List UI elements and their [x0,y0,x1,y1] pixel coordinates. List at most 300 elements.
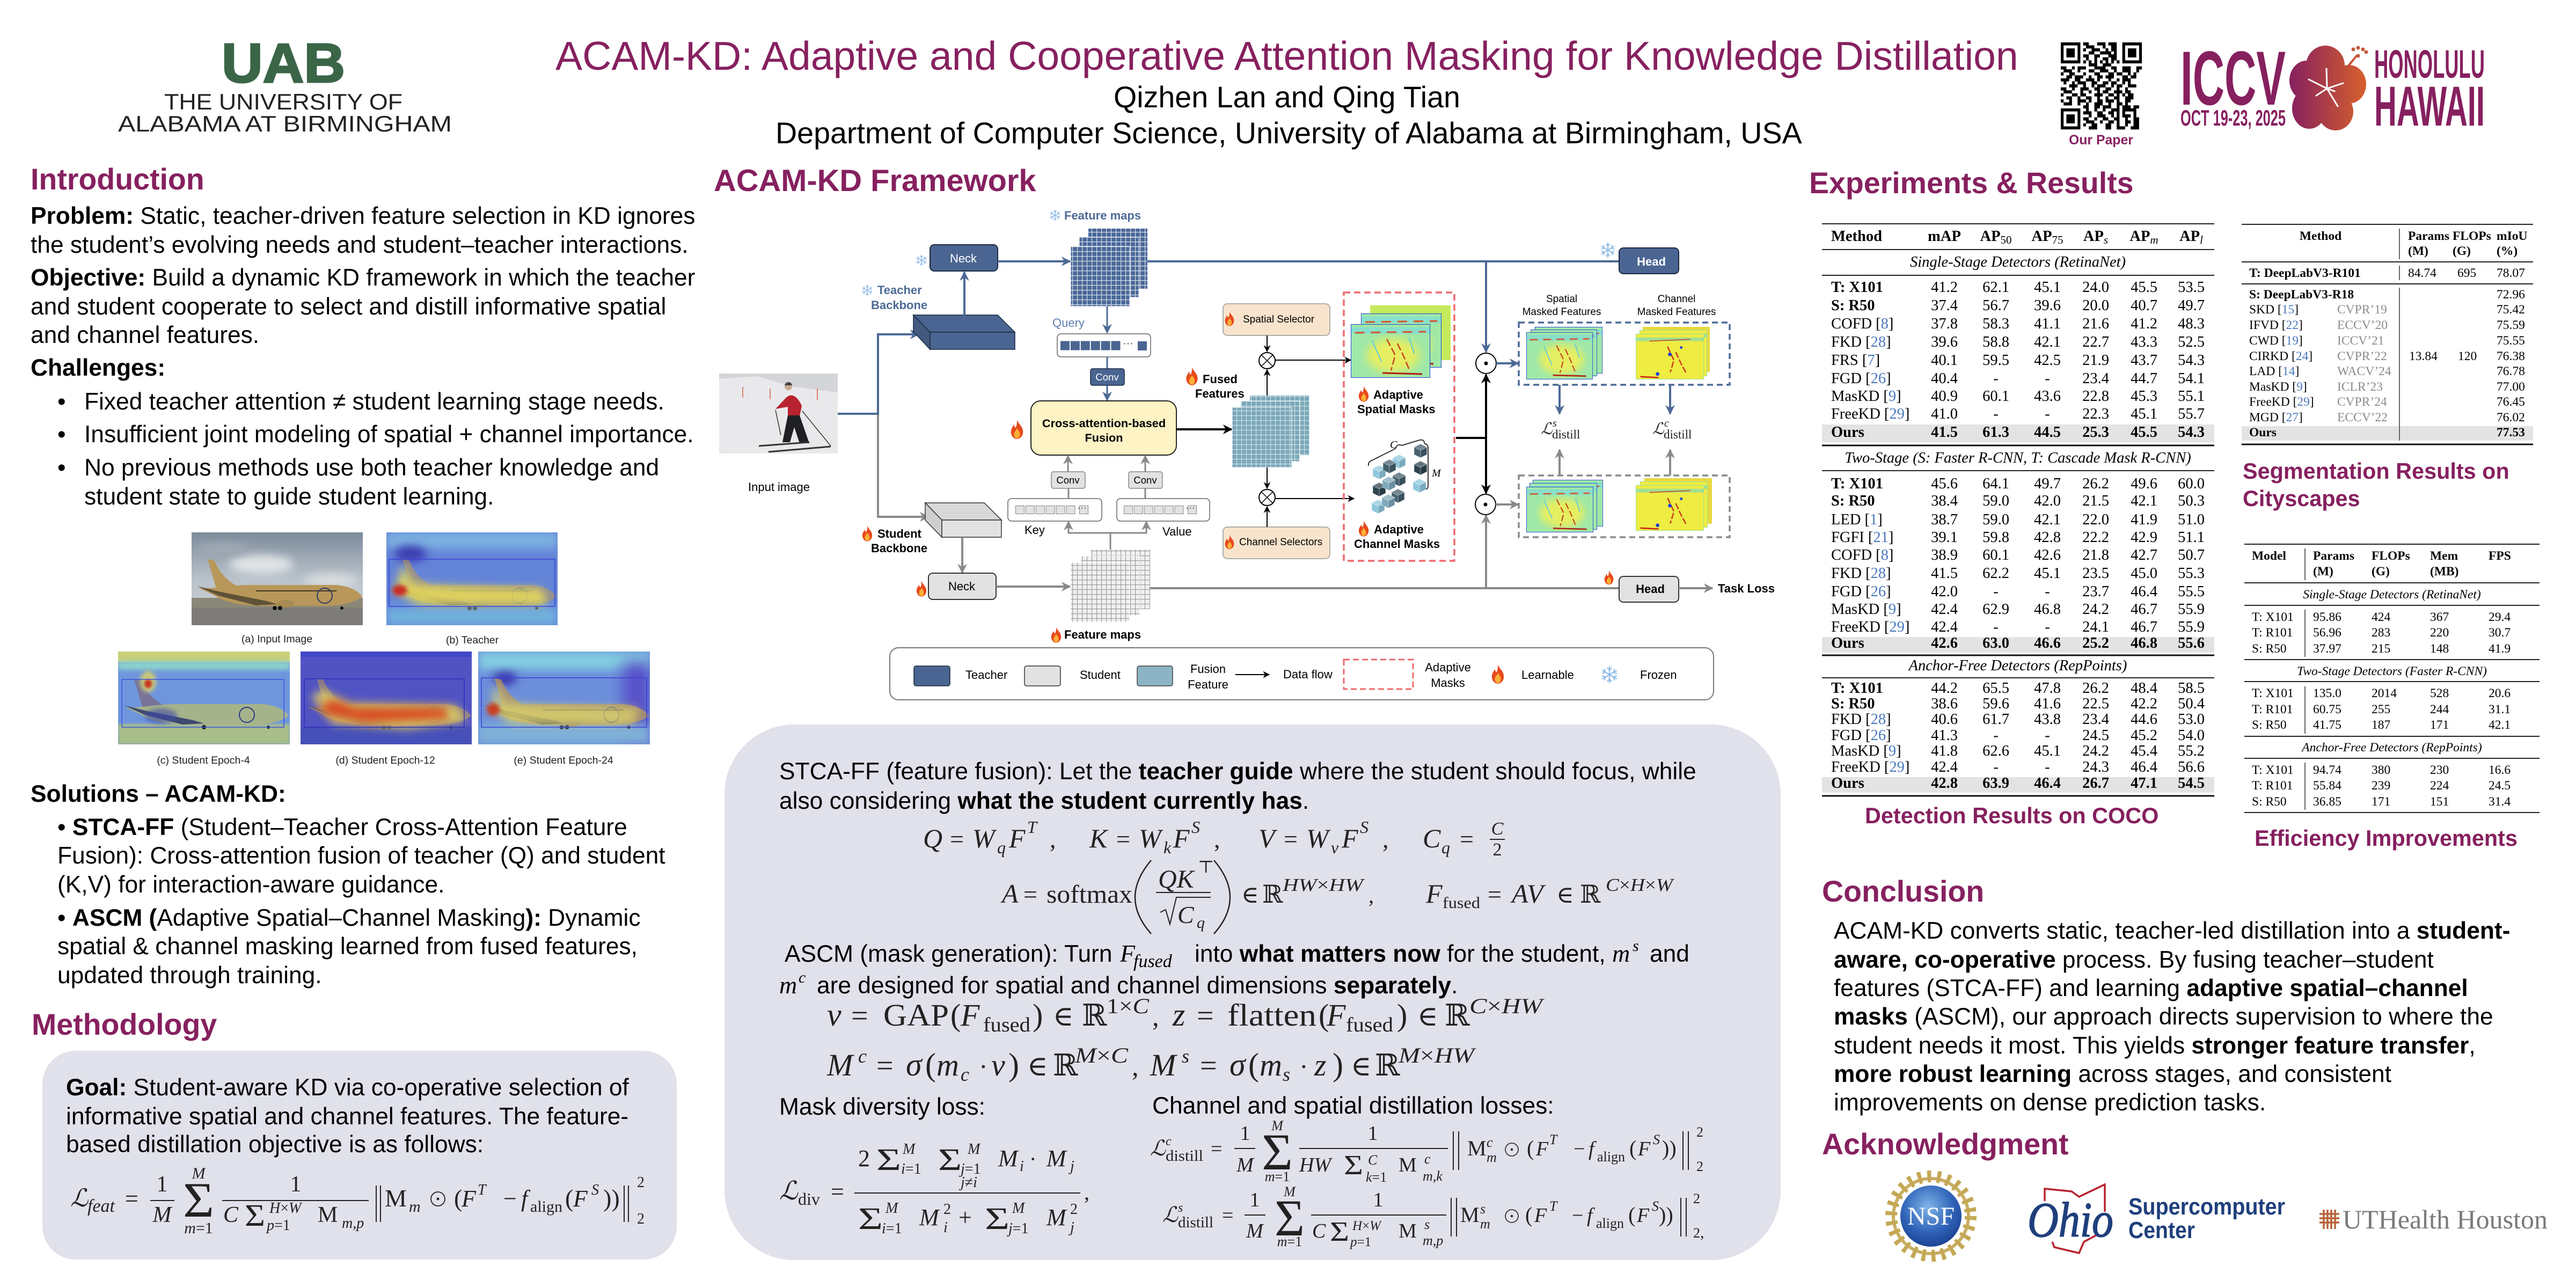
formula: channel and spatial masks: ) [1333,1047,1343,1082]
table: efficiency improvements: 528 [2430,686,2449,700]
formula: channel distillation loss: m [1487,1150,1497,1165]
formula: spatial distillation loss: p=1 [1349,1235,1371,1249]
formula: spatial distillation loss: C [1312,1220,1326,1242]
table: detection results on COCO: Ours [1831,424,1864,441]
cross-attention fusion box: Fusion [1085,431,1123,444]
table: detection results on COCO: 47.1 [2131,775,2157,792]
formula: channel distillation loss: k=1 [1366,1169,1387,1185]
table: detection results on COCO: 46.7 [2131,619,2157,635]
formula: feature distillation loss: Σ [245,1198,265,1233]
table: detection results on COCO: 41.9 [2131,511,2157,528]
formula: diversity loss: i [943,1219,948,1236]
table: detection results on COCO: 48.4 [2131,680,2157,697]
table: efficiency improvements: 148 [2430,642,2449,656]
table: detection results on COCO: 26.2 [2082,475,2109,492]
table: efficiency improvements: 29.4 [2489,610,2511,624]
formula: Q K V: , [1050,825,1056,853]
formula: spatial distillation loss: ( [1628,1203,1635,1227]
table: detection results on COCO: AP [2179,228,2200,245]
formula: spatial distillation loss: − [1572,1204,1583,1227]
formula: Q K V: , [1382,825,1389,853]
heading: Acknowledgment: Acknowledgment [1822,1128,2068,1161]
table: segmentation results: 76.45 [2497,395,2525,409]
formula: channel and spatial masks: m [936,1048,959,1082]
table: detection results on COCO: 41.5 [1931,424,1958,441]
formula: channel and spatial masks: s [1283,1064,1290,1085]
table: detection results on COCO: 47.8 [2034,680,2061,697]
student backbone block [925,503,1001,537]
table: detection results on COCO: 40.7 [2131,297,2157,314]
formula: spatial distillation loss: m,p [1423,1233,1443,1248]
formula: channel distillation loss: Σ [1344,1150,1363,1181]
formula: feature distillation loss: M [318,1203,338,1227]
formula: diversity loss: 2 [858,1145,870,1172]
table: efficiency improvements: (MB) [2430,565,2459,579]
table: efficiency improvements: 41.75 [2313,718,2341,732]
long line and arrow: student features [996,515,1619,588]
formula: feature distillation loss: M [191,1165,206,1182]
formula: spatial distillation loss: f [1587,1204,1595,1227]
table: detection results on COCO: 42.2 [2131,696,2157,712]
heading: Experiments and Results: Experiments & Results [1809,166,2134,200]
table: detection results on COCO: 62.1 [1982,279,2009,296]
table: detection results on COCO: 61.3 [1982,424,2009,441]
table: efficiency improvements: Mem [2430,549,2458,563]
table: efficiency improvements [2244,544,2540,813]
table: efficiency improvements: 31.1 [2489,702,2511,716]
table: detection results on COCO: 25.3 [2082,424,2109,441]
formula: GAP and flatten [827,994,1545,1036]
label: adaptive channel masks: Channel Masks [1354,537,1440,551]
table: efficiency improvements: 424 [2372,610,2390,624]
formula: spatial distillation loss: 2 [1693,1225,1700,1241]
table: segmentation results: MGD [27] [2249,411,2303,425]
label: adaptive spatial masks: Adaptive [1373,388,1423,401]
formula: diversity loss: , [1084,1180,1089,1204]
formula: Q K V: K [1089,823,1109,853]
formula: feature distillation loss: )) [603,1184,620,1212]
table: detection results on COCO: 54.3 [2178,352,2205,369]
formula: spatial distillation loss: ( [1525,1203,1532,1227]
hadamard node: student [1475,494,1518,515]
table: detection results on COCO: 64.1 [1982,475,2009,492]
formula: attention and fused features: fused [1443,894,1480,912]
formula: spatial distillation loss: ℒ [1162,1203,1179,1227]
text block: challenges: • [57,389,66,415]
formula: attention and fused features: ⊤ [1198,857,1214,876]
table: detection results on COCO: 41.2 [1931,279,1958,296]
formula: spatial distillation loss: )) [1659,1203,1673,1227]
table: detection results on COCO: - [1993,370,1999,387]
table: detection results on COCO: 50 [2001,233,2011,246]
formula: diversity loss: j=1 [1007,1220,1029,1237]
formula: Q K V: q [1441,838,1450,857]
table: segmentation results: SKD [15] [2249,303,2299,317]
table: detection results on COCO: 22.0 [2082,511,2109,528]
table: detection results on COCO: 22.8 [2082,388,2109,405]
formula: attention and fused features: QK [1158,865,1196,894]
table: detection results on COCO: FGD [26] [1831,583,1891,600]
table: detection results on COCO: 62.6 [1982,743,2009,759]
text block: solutions: • ASCM (Adaptive Spatial–Channel Masking): Dynamic [57,905,640,931]
text block: ASCM: c [799,969,806,986]
text block: STCA-FF [779,758,1696,814]
image: student epoch 4 heatmap [118,652,290,744]
table: detection results on COCO: 42.1 [2131,493,2157,509]
table: detection results on COCO: FreeKD [29] [1831,759,1909,775]
formula: channel distillation loss: Σ [1262,1123,1293,1181]
table: detection results on COCO: FreeKD [29] [1831,619,1909,635]
table: efficiency improvements: Params [2313,549,2354,563]
spatial selector: Spatial Selector [1243,314,1315,325]
label: fused features [1186,367,1245,400]
table: detection results on COCO: 41.0 [1931,406,1958,422]
formula: attention and fused features: , [1368,883,1374,908]
table: detection results on COCO: 59.5 [1982,352,2009,369]
table: detection results on COCO: 56.6 [2178,759,2205,775]
text block: challenges: No previous methods use both teacher knowledge and [84,455,659,481]
table: detection results on COCO: - [2045,583,2050,600]
text block: ASCM: into what matters now for the student, [1195,941,1606,967]
table: efficiency improvements: FPS [2489,549,2511,563]
caption: segmentation results: Segmentation Results on [2243,459,2509,484]
table: detection results on COCO: 42.0 [2034,493,2061,509]
table: detection results on COCO: 45.5 [2131,279,2157,296]
table: segmentation results: ECCV’20 [2337,318,2388,332]
formula: channel distillation loss: c [1166,1135,1172,1148]
framework diagram [719,209,1775,700]
table: detection results on COCO: 50.7 [2178,547,2205,564]
cross-attention fusion box [1031,401,1176,455]
formula: feature distillation loss [70,1165,645,1237]
formula: channel distill loss: c [1664,418,1669,429]
table: detection results on COCO: Method [1831,228,1882,245]
caption: epoch 4: (c) Student Epoch-4 [157,755,250,766]
table: detection results on COCO: Two-Stage (S: Faster R-CNN, T: Cascade Mask R-CNN) [1845,450,2191,466]
table: detection results on COCO: 23.7 [2082,583,2109,600]
teacher neck: Neck [950,252,977,265]
table: detection results on COCO: 45.1 [2034,565,2061,582]
logo: University of Alabama at Birmingham: ALABAMA AT BIRMINGHAM [118,111,452,136]
text block: STCA-FF: STCA-FF (feature fusion): Let the teacher guide where the student should focus, while [779,758,1696,785]
formula: spatial distillation loss: = [1222,1204,1233,1227]
table: detection results on COCO: 42.4 [1931,619,1958,635]
table: detection results on COCO: 39.6 [2034,297,2061,314]
table: segmentation results: Ours [2249,426,2277,440]
teacher head: Head [1637,255,1666,268]
formula: channel distillation loss: f [1589,1138,1597,1160]
table: detection results on COCO: 22.7 [2082,334,2109,350]
table: segmentation results: 77.53 [2497,426,2525,440]
text block: ASCM: m [779,971,797,999]
formula: feature distillation loss: = [125,1185,138,1212]
conv: query [1091,357,1124,400]
table: detection results on COCO: 55.2 [2178,743,2205,759]
table: detection results on COCO: 55.3 [2178,565,2205,582]
table: detection results on COCO: 46.4 [2131,583,2157,600]
channel selectors [1223,527,1330,559]
caption: input image: (a) Input Image [241,633,312,645]
table: efficiency improvements: 230 [2430,763,2449,777]
table: efficiency improvements: 224 [2430,779,2449,793]
label: adaptive channel masks: Adaptive [1374,523,1424,536]
table: efficiency improvements: (G) [2372,565,2390,579]
logo: ICCV Honolulu Hawaii: HAWAII [2374,75,2485,138]
heading: Introduction: Introduction [31,163,204,196]
formula: channel distillation loss: c [1424,1151,1431,1167]
text block: problem and objective: the student’s evolving needs and student–teacher interactions. [31,232,689,258]
heading: ACAM-KD Framework: ACAM-KD Framework [714,164,1036,198]
table: detection results on COCO: 44.2 [1931,680,1958,697]
table: detection results on COCO: 41.1 [2034,316,2061,332]
formula: channel and spatial masks: ∈ [1351,1051,1372,1082]
formula: attention and fused features: softmax [1046,880,1132,909]
table: detection results on COCO: 49.7 [2178,297,2205,314]
text block: problem and objective: and channel features. [31,322,259,348]
table: efficiency improvements: 244 [2430,702,2449,716]
table: detection results on COCO: 45.6 [1931,475,1958,492]
table: detection results on COCO: - [2045,406,2050,422]
text block: problem and objective: Problem: Static, teacher-driven feature selection in KD ignores [31,203,695,229]
table: detection results on COCO: - [2045,727,2050,744]
formula: channel distillation loss: M [1399,1154,1417,1176]
formula: feature distillation loss: ( [565,1184,573,1212]
formula: spatial distillation loss: M [1460,1203,1480,1227]
table: detection results on COCO: 43.6 [2034,388,2061,405]
formula: channel and spatial masks: v [991,1048,1005,1082]
table: detection results on COCO: Ours [1831,775,1864,792]
formula: feature distillation loss: C [223,1203,239,1227]
table: efficiency improvements: 95.86 [2313,610,2341,624]
table: segmentation results: 76.78 [2497,364,2525,378]
formula: channel and spatial masks: c [858,1045,867,1067]
formula: channel and spatial masks: · [1299,1051,1308,1081]
formula: diversity loss: M [998,1145,1019,1172]
text block: ASCM: s [1633,937,1639,955]
table: detection results on COCO [1822,224,2214,796]
table: detection results on COCO: 38.9 [1931,547,1958,564]
table: detection results on COCO: 42.9 [2131,529,2157,546]
formula: attention and fused features: F [1425,879,1443,909]
table: detection results on COCO: 59.8 [1982,529,2009,546]
text block: ASCM: ASCM (mask generation): Turn [785,941,1113,967]
formula: feature distillation loss: p=1 [266,1217,290,1234]
table: detection results on COCO: 40.9 [1931,388,1958,405]
table: detection results on COCO: 62.9 [1982,601,2009,618]
table: detection results on COCO: 45.5 [2131,424,2157,441]
table: segmentation results: LAD [14] [2249,364,2299,378]
formula: channel distillation loss: M [1236,1154,1255,1176]
table: segmentation results: 76.02 [2497,411,2525,425]
image: input airplane [192,532,363,625]
table: detection results on COCO: 22.2 [2082,529,2109,546]
conv and key branch: ··· [1077,502,1087,513]
formula: diversity loss: + [958,1204,972,1231]
teacher neck [917,245,998,271]
table: detection results on COCO: 22.3 [2082,406,2109,422]
formula: feature distillation loss: Σ [183,1173,214,1227]
arrows: masked features to distill losses [1560,385,1670,475]
table: detection results on COCO: 21.8 [2082,547,2109,564]
caption: teacher: (b) Teacher [446,634,499,646]
table: detection results on COCO: AP [2083,228,2104,245]
table: detection results on COCO: 45.1 [2131,406,2157,422]
formula: GAP and flatten: ) [1397,998,1407,1033]
formula: channel and spatial masks: ℝ [1375,1049,1401,1082]
table: detection results on COCO: FreeKD [29] [1831,406,1909,422]
table: segmentation results: ICCV’21 [2337,334,2384,348]
table: detection results on COCO: 53.5 [2178,279,2205,296]
table: efficiency improvements: T: X101 [2252,686,2294,700]
table: detection results on COCO: s [2104,233,2108,246]
formula: attention and fused features: q [1197,914,1205,932]
formula: attention and fused features: ℝ [1580,881,1601,908]
table: detection results on COCO: 45.4 [2131,743,2157,759]
formula: channel and spatial masks: · [979,1051,988,1081]
table: detection results on COCO: 42.4 [1931,601,1958,618]
formula: spatial distillation loss: 1 [1249,1189,1260,1211]
table: detection results on COCO: Single-Stage Detectors (RetinaNet) [1910,254,2126,270]
formula: diversity loss: 2 [1070,1201,1078,1218]
table: segmentation results: FLOPs [2453,229,2491,243]
formula: GAP and flatten: 1×C [1107,994,1150,1018]
formula: channel distillation loss: F [1535,1138,1549,1160]
text block: challenges [31,355,694,510]
table: detection results on COCO: COFD [8] [1831,547,1893,564]
formula: channel and spatial masks: ℝ [1053,1049,1079,1082]
table: efficiency improvements: 20.6 [2489,686,2511,700]
formula: feature distillation loss: m=1 [184,1219,213,1237]
text block: ASCM: are designed for spatial and channel dimensions separately. [817,972,1458,999]
formula: channel and spatial masks: m [1260,1048,1282,1082]
table: detection results on COCO: 37.4 [1931,297,1958,314]
caption: efficiency improvements: Efficiency Improvements [2255,826,2518,851]
table: detection results on COCO: 54.0 [2178,727,2205,744]
formula: feature distillation loss: feat [87,1196,116,1216]
text block: solutions: spatial & channel masking learned from fused features, [57,933,638,960]
table: segmentation results: CIRKD [24] [2249,349,2312,363]
formula: channel distillation loss: )) [1662,1136,1677,1160]
icon: fusion flame [1011,420,1023,439]
formula: channel and spatial masks: s [1182,1045,1189,1067]
table: efficiency improvements: 135.0 [2313,686,2341,700]
formula: spatial distillation loss: , [1700,1224,1704,1241]
table: efficiency improvements: 151 [2430,795,2449,809]
formula: diversity loss: i [1020,1158,1024,1175]
channel masks cubes [1368,439,1441,514]
formula: Q K V: W [1306,823,1331,853]
table: detection results on COCO: 39.1 [1931,529,1958,546]
QR caption: Our Paper [2069,133,2133,148]
table: segmentation results: 695 [2457,266,2476,280]
formula: attention and fused features: HW ×HW [1282,875,1365,895]
channel masks cubes: C [1390,439,1397,451]
formula: channel and spatial masks: M [1150,1048,1177,1082]
table: efficiency improvements: 16.6 [2489,763,2511,777]
formula: diversity loss: M [1046,1204,1067,1231]
logo: University of Alabama at Birmingham: THE UNIVERSITY OF [164,89,402,114]
formula: Q K V: = [950,825,964,853]
table: detection results on COCO: 58.5 [2178,680,2205,697]
table: detection results on COCO: 24.2 [2082,601,2109,618]
table: detection results on COCO: T: X101 [1831,279,1883,296]
spatial masks images [1351,305,1451,378]
table: detection results on COCO: 41.6 [2034,696,2061,712]
formula: channel distillation loss: HW [1299,1154,1333,1176]
cross-attention fusion box: Cross-attention-based [1042,416,1166,430]
text block: STCA-FF: also considering what the student currently has. [779,788,1309,814]
table: detection results on COCO: 51.1 [2178,529,2205,546]
table: detection results on COCO: 38.4 [1931,493,1958,509]
formula: channel distillation loss: ( [1527,1136,1534,1160]
logo: ICCV Honolulu Hawaii: ICCV [2180,36,2286,121]
formula: channel distillation loss: 1 [1240,1122,1250,1145]
formula: diversity loss: M [1012,1200,1026,1217]
title: ACAM-KD: Adaptive and Cooperative Attention Masking for Knowledge Distillation [555,33,2018,78]
formula: channel and spatial masks: , [1132,1051,1139,1081]
table: detection results on COCO: 63.0 [1982,635,2009,652]
table: detection results on COCO: 46.4 [2131,759,2157,775]
table: segmentation results: 75.42 [2497,303,2525,317]
text block: conclusion: improvements on dense prediction tasks. [1834,1089,2266,1116]
text block: challenges: student state to guide student learning. [84,484,494,510]
table: segmentation results: 77.00 [2497,380,2525,394]
formula: spatial distillation loss: 1 [1373,1189,1384,1211]
table: detection results on COCO: 46.8 [2034,601,2061,618]
table: efficiency improvements: 41.9 [2489,642,2511,656]
formula: diversity loss: Σ [985,1201,1009,1236]
formula: feature distillation loss: F [461,1185,477,1212]
spatial selector [1223,304,1330,335]
formula: diversity loss [779,1141,1089,1237]
table: segmentation results: Method [2300,229,2341,243]
table: detection results on COCO: FKD [28] [1831,334,1891,350]
table: detection results on COCO: 45.1 [2034,743,2061,759]
table: detection results on COCO: l [2200,233,2203,246]
table: segmentation results [2242,224,2533,444]
formula: spatial distillation loss: s [1178,1201,1183,1215]
formula: feature distillation loss: M [152,1203,173,1227]
table: detection results on COCO: AP [2032,228,2052,245]
formula: Q K V: V [1258,823,1278,853]
label: mask diversity loss: Mask diversity loss: [779,1094,985,1120]
formula: diversity loss: Σ [876,1142,901,1177]
table: efficiency improvements: T: X101 [2252,610,2294,624]
table: efficiency improvements: FLOPs [2372,549,2410,563]
table: detection results on COCO: 40.4 [1931,370,1958,387]
formula: channel and spatial masks: σ [1230,1047,1247,1082]
table: segmentation results: Params [2408,229,2449,243]
table: detection results on COCO: 39.6 [1931,334,1958,350]
formula: channel distillation loss: = [1211,1138,1222,1160]
formula: diversity loss: M [919,1204,940,1231]
table: efficiency improvements: 283 [2372,626,2390,640]
label: adaptive spatial masks [1357,386,1436,416]
text block: challenges: Fixed teacher attention ≠ student learning stage needs. [84,389,664,415]
query [1052,306,1151,357]
table: efficiency improvements: Model [2252,549,2286,563]
table: detection results on COCO: 60.1 [1982,547,2009,564]
label: student backbone: Student [877,527,922,540]
table: detection results on COCO: - [1993,406,1999,422]
table: segmentation results: ICLR’23 [2337,380,2383,394]
formula: attention and fused features: ∈ [1556,882,1574,908]
caption: segmentation results [2243,459,2509,511]
table: detection results on COCO: LED [1] [1831,511,1883,528]
table: detection results on COCO: 59.0 [1982,493,2009,509]
formula: Q K V: k [1163,838,1172,857]
table: detection results on COCO: 49.6 [2131,475,2157,492]
